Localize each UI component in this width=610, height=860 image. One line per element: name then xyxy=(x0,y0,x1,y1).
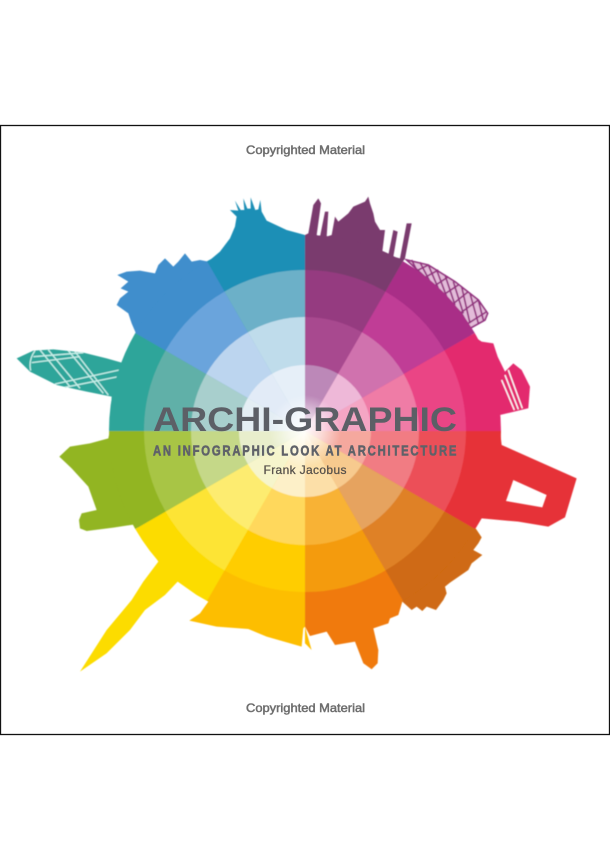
silhouette: spiked tower, teal blue xyxy=(210,197,305,430)
wheel sectors and rings xyxy=(86,212,524,650)
silhouette: spire, yellow xyxy=(80,431,305,672)
silhouette: cathedral, dark orange xyxy=(305,431,482,611)
silhouette: temple, gold xyxy=(189,431,312,650)
author: Frank Jacobus xyxy=(264,463,346,477)
central white glow xyxy=(269,395,341,467)
ring: second band xyxy=(178,304,432,558)
title: ARCHI-GRAPHIC xyxy=(153,401,457,439)
silhouette: stadium bridge, magenta xyxy=(305,260,488,431)
colour wheel with building silhouettes xyxy=(17,197,577,672)
bridge lattice xyxy=(412,260,487,323)
bottom copyright notice: Copyrighted Material xyxy=(246,701,365,715)
top copyright notice: Copyrighted Material xyxy=(246,143,365,157)
silhouette: wide building, green xyxy=(59,430,305,531)
silhouette: stepped building, pink xyxy=(305,335,530,431)
silhouette: opera shells, blue xyxy=(117,253,305,430)
building stripes xyxy=(502,370,522,410)
silhouette: gherkin tower, teal xyxy=(17,335,305,432)
gherkin lattice lines xyxy=(30,350,119,395)
silhouette: tower, orange xyxy=(305,431,402,669)
silhouette: domed palace, purple xyxy=(305,197,412,431)
ring: inner circle xyxy=(231,357,379,505)
ring: outer band xyxy=(86,212,524,650)
silhouette: cantilever block, red xyxy=(305,430,577,528)
ring: third band xyxy=(125,251,485,611)
book cover frame xyxy=(0,126,610,734)
subtitle: AN INFOGRAPHIC LOOK AT ARCHITECTURE xyxy=(153,442,457,459)
